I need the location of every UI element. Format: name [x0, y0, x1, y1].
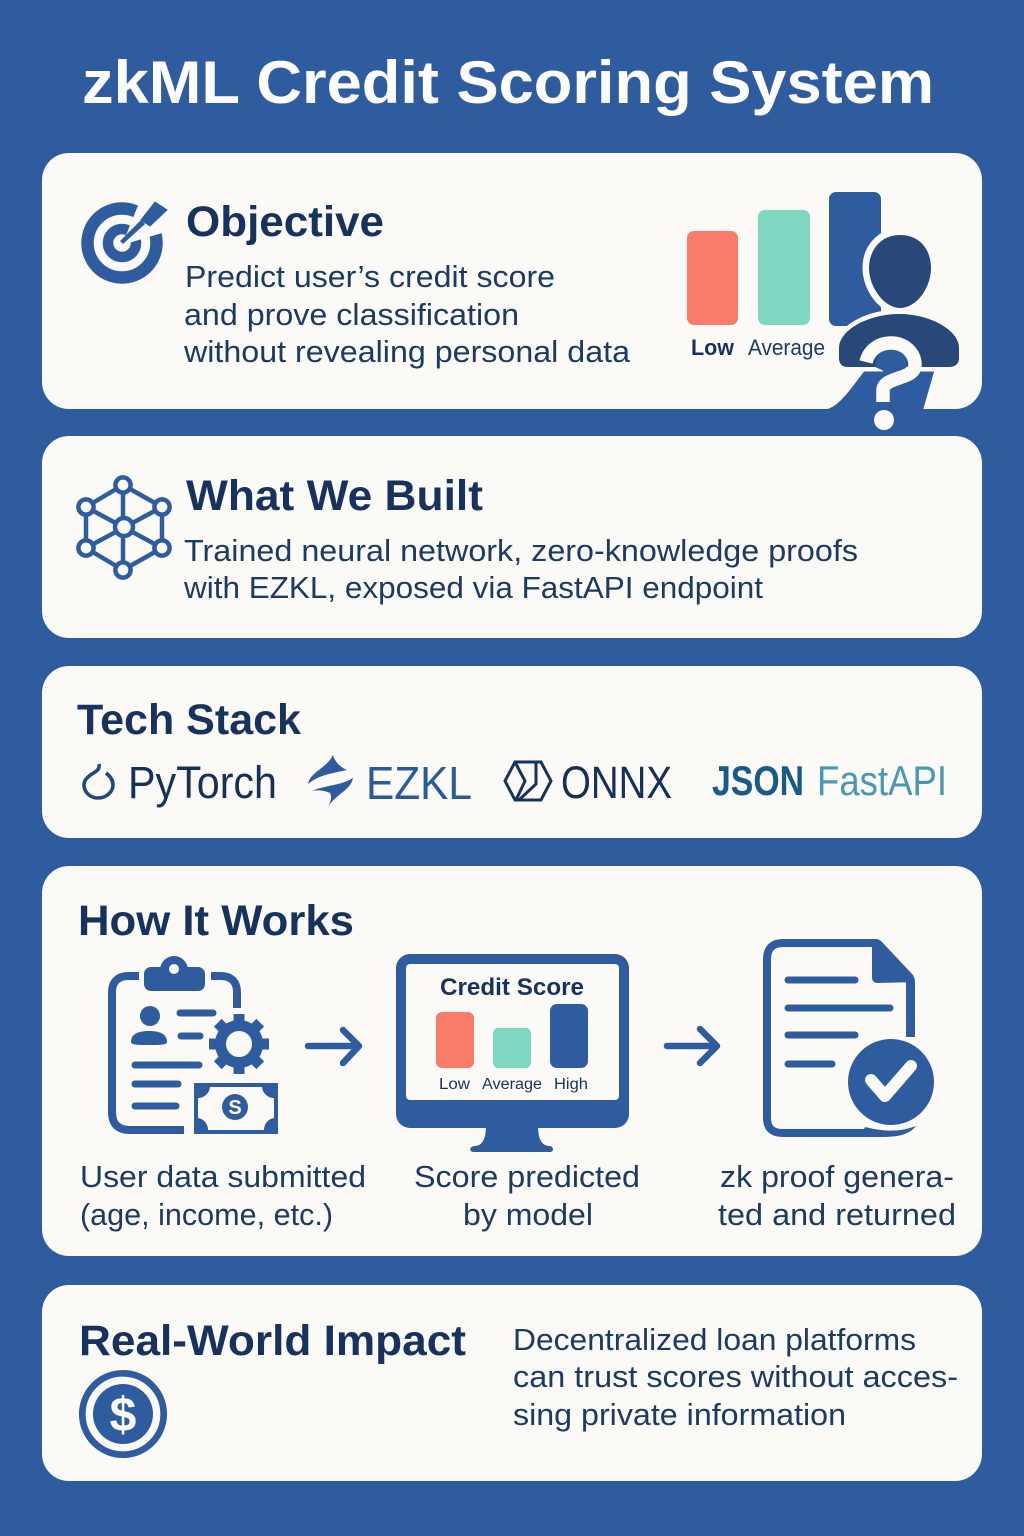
text: impact description: sing private information [513, 1397, 846, 1432]
chart: credit bars: Average [748, 335, 825, 360]
text: objective description [183, 259, 631, 369]
text: objective description: without revealing personal data [183, 334, 631, 369]
icon: dollar coin: $ [110, 1389, 137, 1442]
caption: step 1: (age, income, etc.) [80, 1197, 333, 1232]
text: build description: Trained neural network, zero-knowledge proofs [184, 533, 858, 568]
text: build description [183, 533, 858, 605]
arrow: model to proof [667, 1029, 717, 1063]
icon: monitor with credit score chart: High [554, 1076, 588, 1093]
logo: onnx: ONNX [561, 757, 672, 808]
icon: target with dart [88, 202, 172, 278]
icon: dollar coin [82, 1373, 164, 1455]
logo: ezkl: EZKL [366, 757, 472, 809]
chart: credit bars [687, 192, 881, 360]
icon: monitor with credit score chart [396, 954, 629, 1152]
panel: objective [42, 153, 982, 430]
caption: step 2: Score predicted [414, 1159, 640, 1194]
caption: step 1 [80, 1159, 366, 1232]
heading: objective: Objective [186, 198, 384, 246]
logo: fastapi: FastAPI [817, 757, 947, 804]
panel: real-world impact [42, 1285, 982, 1481]
arrow: data to model [308, 1030, 359, 1063]
icon: clipboard with data, gear and money [112, 956, 276, 1132]
caption: step 1: User data submitted [80, 1159, 366, 1194]
text: objective description: and prove classification [184, 297, 519, 332]
icon: document with check [767, 939, 938, 1137]
icon: monitor with credit score chart: Average [482, 1076, 542, 1093]
caption: step 3 [718, 1159, 956, 1232]
icon: person with question mark [823, 235, 959, 430]
caption: step 2 [414, 1159, 640, 1232]
icon: clipboard with data, gear and money: S [228, 1097, 242, 1119]
logo: ezkl [308, 755, 472, 809]
panel: what we built [42, 436, 982, 638]
text: impact description [513, 1322, 958, 1432]
caption: step 3: ted and returned [718, 1197, 956, 1232]
heading: real-world impact: Real-World Impact [79, 1317, 466, 1365]
logo: pytorch: PyTorch [128, 757, 277, 808]
icon: monitor with credit score chart: Credit Score [440, 974, 584, 1001]
heading: what we built: What We Built [186, 472, 483, 520]
text: impact description: can trust scores without acces- [513, 1359, 958, 1394]
logo: onnx [505, 757, 672, 808]
caption: step 2: by model [463, 1197, 593, 1232]
panel: how it works [42, 866, 982, 1256]
logo: json: JSON [712, 757, 804, 804]
text: impact description: Decentralized loan platforms [513, 1322, 916, 1357]
title: zkML Credit Scoring System [82, 49, 934, 116]
caption: step 3: zk proof genera- [720, 1159, 954, 1194]
chart: credit bars: Low [691, 335, 735, 360]
icon: neural network [78, 477, 170, 578]
heading: how it works: How It Works [78, 897, 354, 945]
icon: monitor with credit score chart: Low [439, 1076, 471, 1093]
panel: tech stack [42, 666, 982, 838]
text: objective description: Predict user’s credit score [185, 259, 555, 294]
text: build description: with EZKL, exposed via FastAPI endpoint [183, 570, 763, 605]
heading: tech stack: Tech Stack [77, 696, 301, 744]
